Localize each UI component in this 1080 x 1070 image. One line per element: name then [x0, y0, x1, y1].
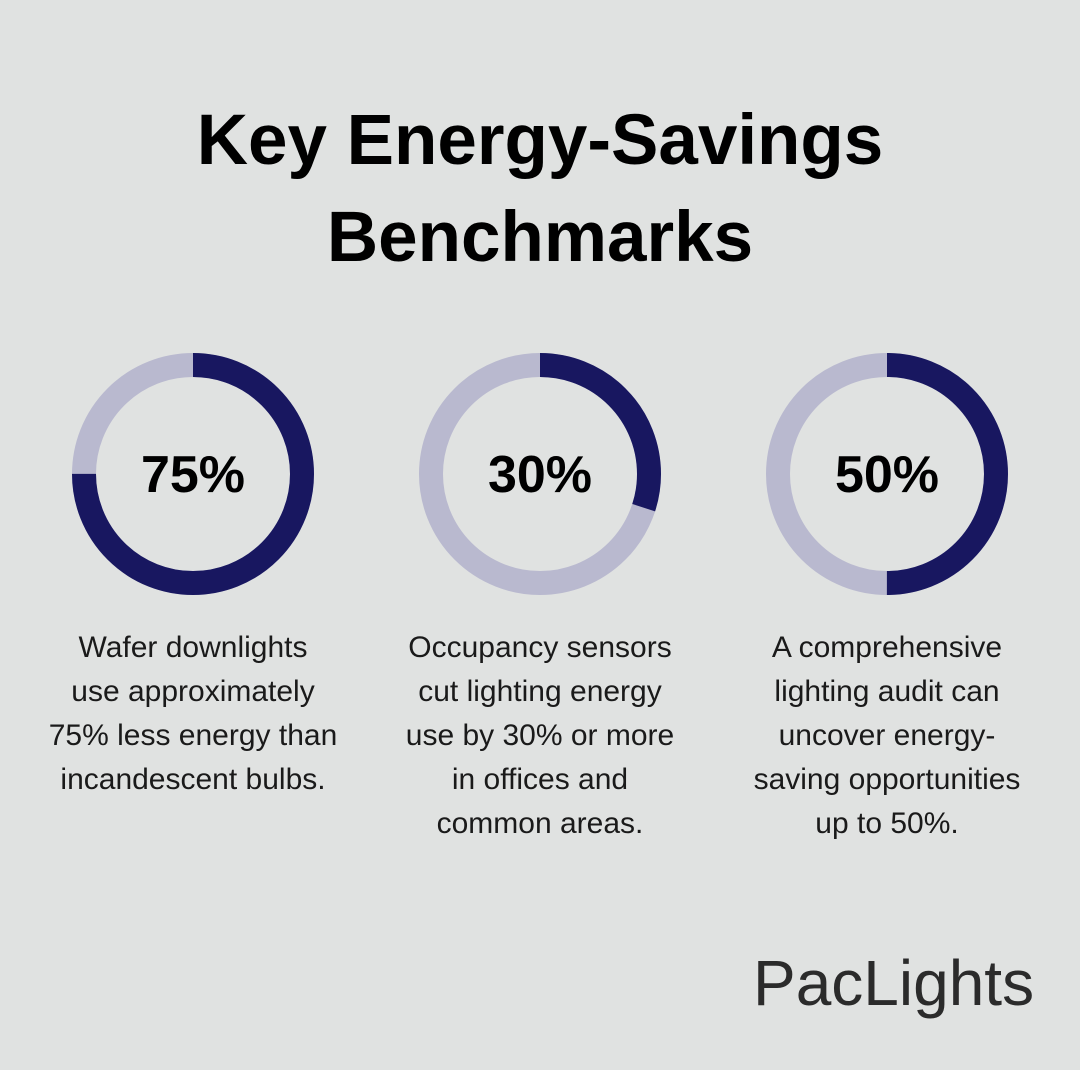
donut: 30%: 30%: [488, 446, 592, 504]
text: wafer downlights: [49, 631, 337, 796]
donut: 50%: [778, 365, 996, 583]
text: lighting audit: [754, 631, 1020, 840]
donut: 75%: [84, 365, 302, 583]
donut: 75%: 75%: [141, 446, 245, 504]
text: occupancy sensors: common areas.: [437, 807, 643, 840]
text: lighting audit: A comprehensive: [772, 631, 1002, 664]
donut charts: [72, 353, 1008, 595]
text: occupancy sensors: [406, 631, 674, 840]
title: [197, 101, 883, 277]
text: lighting audit: up to 50%.: [815, 807, 959, 840]
donut: 30%: [431, 365, 649, 583]
text: lighting audit: uncover energy-: [779, 719, 995, 752]
text: wafer downlights: use approximately: [71, 675, 315, 708]
text: occupancy sensors: cut lighting energy: [418, 675, 662, 708]
text: occupancy sensors: use by 30% or more: [406, 719, 674, 752]
logo: PacLights: [753, 947, 1034, 1019]
text: wafer downlights: Wafer downlights: [78, 631, 307, 664]
text: lighting audit: lighting audit can: [774, 675, 1000, 708]
text: occupancy sensors: Occupancy sensors: [408, 631, 672, 664]
text: occupancy sensors: in offices and: [452, 763, 628, 796]
text: wafer downlights: 75% less energy than: [49, 719, 337, 752]
title: Benchmarks: [327, 198, 753, 277]
text: lighting audit: saving opportunities: [754, 763, 1020, 796]
donut: 50%: 50%: [835, 446, 939, 504]
title: Key Energy-Savings: [197, 101, 883, 180]
text: wafer downlights: incandescent bulbs.: [60, 763, 326, 796]
